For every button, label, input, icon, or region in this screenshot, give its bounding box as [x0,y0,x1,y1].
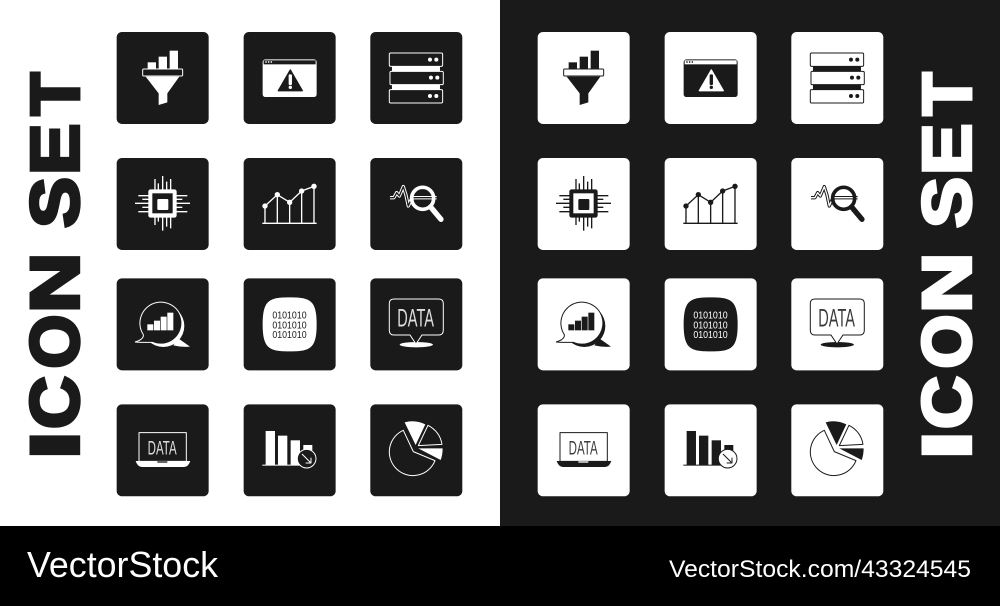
tile: pie chart [791,404,883,496]
tile: funnel [538,32,630,124]
icon: waveform magnifier [811,187,862,219]
tile: line chart [244,158,336,250]
icon: declining bars with clock [262,431,316,468]
tile: processor [538,158,630,250]
title: ICON SET left: S [16,177,93,228]
title: ICON SET left: O [16,314,93,368]
icon: binary code blob: 0101010 [693,311,728,322]
icon: pie chart [389,421,443,476]
tile: pie chart [370,404,462,496]
title: ICON SET right: S [908,177,985,228]
title: ICON SET right: N [908,252,985,313]
tile: server [370,32,462,124]
icon: binary code blob [684,297,738,351]
icon: binary code blob [263,297,317,351]
tile: funnel [117,32,209,124]
tile: browser warning [244,32,336,124]
icon: laptop data: DATA [148,438,177,459]
panel: black icon set [538,32,985,496]
tile: binary code [244,278,336,370]
icon: processor chip [135,176,190,231]
title: ICON SET left: I [16,431,93,460]
tile: browser warning [665,32,757,124]
icon: binary code blob: 0101010 [272,311,307,322]
icon: browser warning [684,59,738,97]
icon: line chart [262,184,317,223]
footer id: VectorStock.com/43324545: VectorStock.com/43324545 [669,556,971,583]
title: ICON SET right: E [908,124,985,175]
title: ICON SET left: T [16,72,93,116]
tile: declining bars [244,404,336,496]
tile: server [791,32,883,124]
panel: white icon set [16,32,462,496]
icon: declining bars with clock [683,431,737,468]
tile: processor [117,158,209,250]
icon: server stack [810,53,864,103]
icon: browser warning [263,59,317,97]
tile: declining bars [665,404,757,496]
tile: data pin [791,278,883,370]
icon: chat bubble with bars [556,302,611,347]
footer brand: VectorStock: VectorStock [27,544,219,585]
title: ICON SET left: C [16,376,93,429]
tile: line chart [665,158,757,250]
icon: line chart [683,184,738,223]
tile: chat bars [117,278,209,370]
tile: signal search [370,158,462,250]
icon: binary code blob: 0101010 [693,320,728,331]
icon: binary code blob: 0101010 [272,330,307,341]
icon: binary code blob: 0101010 [693,330,728,341]
tile: data pin [370,278,462,370]
tile: signal search [791,158,883,250]
tile: chat bars [538,278,630,370]
title: ICON SET right: T [908,72,985,116]
title: ICON SET right: I [908,431,985,460]
title: ICON SET left: E [16,124,93,175]
icon: laptop data: DATA [569,438,598,459]
tile: laptop data [538,404,630,496]
icon: waveform magnifier [390,187,441,219]
icon: pie chart [810,421,864,476]
icon: funnel with bars [143,51,183,105]
icon: server stack [389,53,443,103]
tile: binary code [665,278,757,370]
title: ICON SET right: O [908,314,985,368]
title: ICON SET left: N [16,252,93,313]
title: ICON SET right: C [908,376,985,429]
icon: data map pin: DATA [397,305,434,333]
icon: binary code blob: 0101010 [272,320,307,331]
icon: funnel with bars [564,51,604,105]
icon: chat bubble with bars [135,302,190,347]
icon: processor chip [556,176,611,231]
tile: laptop data [117,404,209,496]
icon: data map pin: DATA [818,305,855,333]
